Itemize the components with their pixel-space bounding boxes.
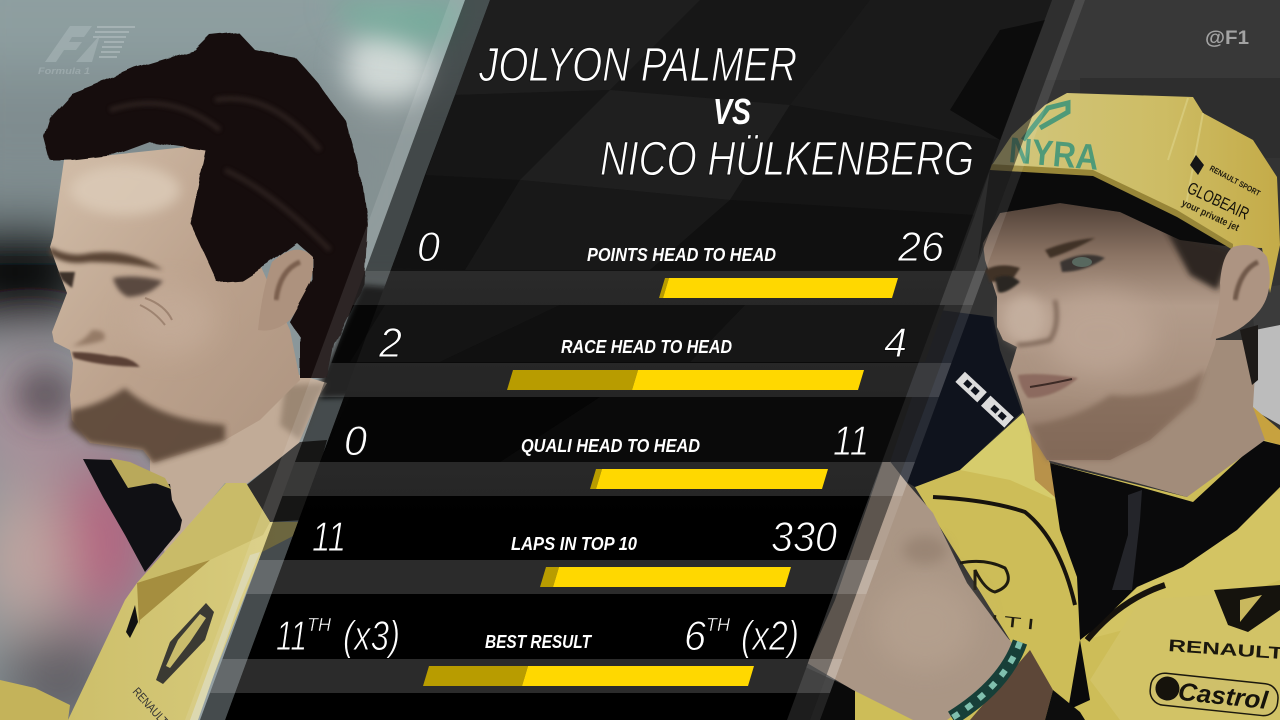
logo: Renault diamond (156, 603, 214, 684)
photo: Jolyon Palmer (0, 0, 490, 720)
value: Palmer best result (276, 612, 400, 659)
black area below hand (780, 660, 855, 720)
photo: Nico Hülkenberg: RENAULT (1168, 636, 1280, 663)
bar tracks (210, 271, 985, 693)
background right of neck (1250, 285, 1280, 335)
row: race head to head (378, 319, 907, 390)
value: Palmer qualifying: 0 (344, 417, 368, 464)
panel: central dark slanted panel (225, 0, 1052, 720)
title: VS: VS (713, 91, 751, 132)
forehead highlight (70, 165, 180, 215)
bar: best result (423, 666, 754, 686)
value: Palmer races: 2 (378, 319, 402, 366)
value: Hülkenberg best result: 6 (684, 612, 707, 659)
brow and eye (1045, 238, 1095, 258)
cap (990, 93, 1280, 293)
label: best result: BEST RESULT (485, 632, 593, 652)
label: quali head to head: QUALI HEAD TO HEAD (521, 436, 700, 456)
wrist (970, 650, 1053, 720)
watermark: @F1: @F1 (1205, 28, 1249, 49)
bar: race (507, 370, 864, 390)
slanted translucent band: left (185, 0, 490, 720)
row: quali head to head (344, 417, 869, 489)
hair (44, 32, 368, 378)
hand (807, 455, 1018, 720)
logo: Formula 1 (38, 26, 135, 76)
stubble (1030, 370, 1205, 460)
photo: Nico Hülkenberg: RENAULT SPORT (1208, 164, 1262, 198)
ear (1210, 245, 1270, 340)
cuff (1045, 690, 1085, 720)
low-poly texture (320, 0, 1052, 462)
logo: Formula 1: Formula 1 (38, 66, 90, 76)
cap logos: NYRA (1007, 129, 1101, 178)
photo: Nico Hülkenberg (780, 0, 1280, 720)
label: laps in top 10: LAPS IN TOP 10 (511, 534, 637, 554)
jacket: black collar right (247, 440, 327, 522)
jacket: black collar left (83, 459, 182, 572)
cheek highlight (1045, 293, 1155, 377)
row: points head to head (417, 223, 945, 298)
title: Nico Hülkenberg: NICO HÜLKENBERG (600, 133, 974, 186)
face (50, 145, 300, 463)
nose and mouth (1017, 300, 1057, 345)
photo: Nico Hülkenberg: GLOBEAIR (1184, 178, 1252, 224)
value: Palmer best result: 11 (276, 612, 307, 659)
hair shade (1165, 228, 1233, 290)
value: Palmer best result: (x3) (343, 612, 400, 659)
bar: laps (540, 567, 791, 587)
title: Jolyon Palmer: JOLYON PALMER (478, 39, 797, 92)
row: best result (276, 612, 799, 686)
hair behind ear (1240, 325, 1258, 385)
jacket logos (960, 561, 1008, 592)
value: Palmer best result: TH (307, 615, 332, 635)
brow and eye (50, 247, 163, 270)
photo: Nico Hülkenberg: ITI (990, 612, 1041, 634)
value: Hülkenberg races: 4 (884, 319, 907, 366)
jacket (850, 407, 1280, 720)
bracelet (952, 642, 1020, 718)
ear (258, 250, 313, 331)
slanted translucent band: right (787, 0, 1085, 720)
zip (933, 497, 1075, 605)
nose shadow (72, 330, 105, 346)
mouth (72, 352, 140, 367)
photo: Nico Hülkenberg: Castrol (1177, 678, 1270, 715)
bar: quali (590, 469, 828, 489)
jacket body (68, 483, 300, 720)
face (983, 203, 1230, 460)
neck (1047, 340, 1265, 497)
navy background (885, 310, 1022, 487)
label: race head to head: RACE HEAD TO HEAD (561, 337, 732, 357)
bar: points (659, 278, 898, 298)
value: Hülkenberg best result (684, 612, 799, 659)
photo: Nico Hülkenberg: your private jet (1180, 198, 1241, 234)
row: laps in top 10 (312, 513, 838, 587)
value: Hülkenberg best result: (x2) (741, 612, 799, 659)
value: Hülkenberg points: 26 (897, 223, 945, 270)
neck (150, 375, 327, 555)
beard (70, 388, 225, 463)
cap under brim (978, 168, 1233, 260)
black inner shirt (1050, 440, 1280, 710)
value: Hülkenberg best result: TH (706, 615, 731, 635)
white stripes (955, 372, 1014, 428)
label: points head to head: POINTS HEAD TO HEAD (587, 245, 776, 265)
value: Palmer points: 0 (417, 223, 441, 270)
value: Hülkenberg laps: 330 (771, 513, 838, 560)
value: Hülkenberg qualifying: 11 (833, 417, 869, 464)
value: Palmer laps: 11 (312, 513, 346, 560)
